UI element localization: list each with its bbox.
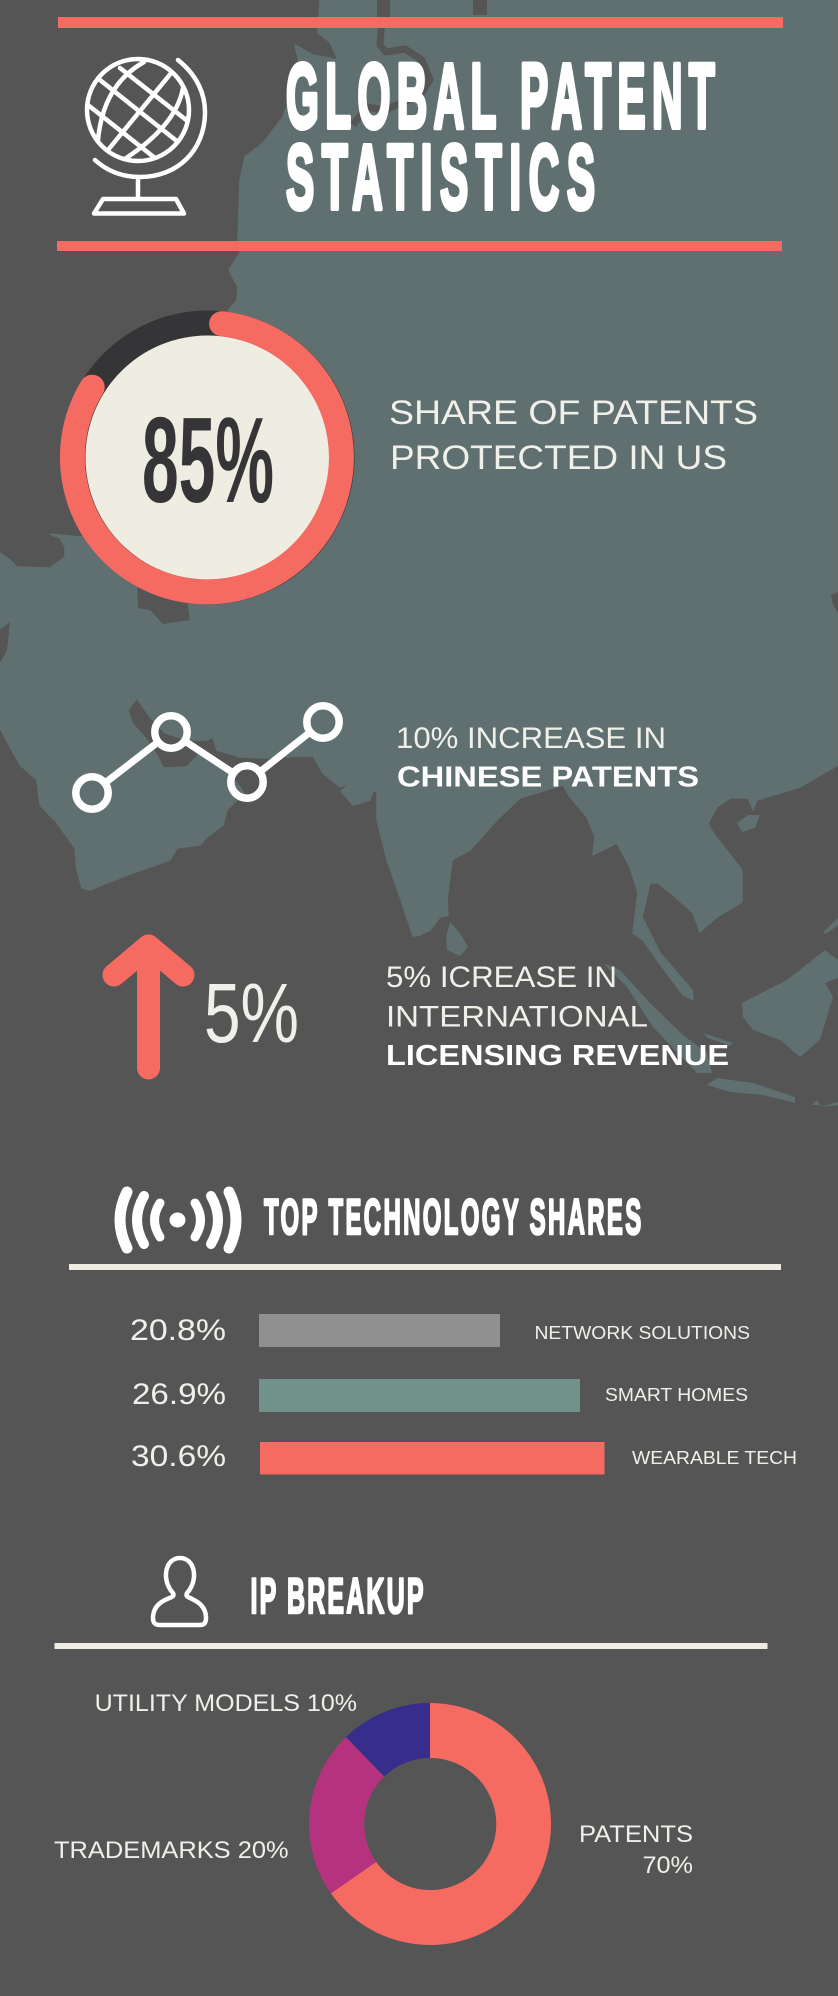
Hainan (737, 815, 760, 832)
icon: line chart (76, 706, 339, 809)
title (286, 45, 715, 229)
bar: wearable tech: 30.6% (131, 1440, 226, 1473)
Caspian Sea (137, 585, 190, 624)
label: utility models: UTILITY MODELS 10% (95, 1690, 357, 1717)
icon: broadcast signal (120, 1192, 236, 1248)
Borneo (742, 950, 838, 1057)
segment: utility models 10% (346, 1703, 430, 1776)
stat text: licensing revenue: INTERNATIONAL (386, 1000, 648, 1034)
Eastern islands (812, 918, 838, 1107)
Java (707, 1078, 795, 1103)
bar: wearable tech: WEARABLE TECH (632, 1447, 797, 1468)
label: patents: 70% (642, 1852, 693, 1879)
title: GLOBAL PATENT (286, 45, 715, 148)
stat: 85% progress ring: 85% (142, 392, 274, 528)
stat text: Chinese patents: CHINESE PATENTS (397, 762, 699, 794)
map of Asia (0, 0, 838, 1107)
Sumatra (603, 963, 712, 1073)
segment: trademarks 20% (309, 1737, 384, 1893)
stat text: licensing revenue: LICENSING REVENUE (386, 1040, 729, 1072)
bar: smart homes: 26.9% (132, 1378, 226, 1411)
stat: 5%: 5% (204, 966, 299, 1060)
heading: IP breakup: IP BREAKUP (250, 1569, 424, 1624)
section rule (54, 1643, 768, 1649)
Sri Lanka (446, 922, 468, 956)
River inlet (353, 17, 430, 125)
top red rule (58, 17, 783, 28)
bar: wearable tech (131, 1440, 797, 1474)
title: STATISTICS (286, 126, 595, 229)
Northern lakes (377, 0, 838, 612)
stat text: share of patents (389, 394, 758, 477)
section rule (69, 1264, 781, 1270)
icon: globe (87, 59, 205, 214)
segment: patents 70% (331, 1703, 551, 1945)
Left sliver (0, 622, 10, 663)
label: trademarks: TRADEMARKS 20% (54, 1837, 289, 1864)
heading: top technology shares: TOP TECHNOLOGY SHARES (264, 1191, 641, 1245)
Bangka (703, 1033, 733, 1046)
stat text: share of patents: SHARE OF PATENTS (389, 394, 758, 432)
stat text: Chinese patents (396, 722, 699, 794)
donut chart: IP breakup (309, 1703, 551, 1945)
bar chart: technology shares (130, 1314, 797, 1474)
bar: network solutions: NETWORK SOLUTIONS (534, 1322, 750, 1343)
bottom red rule (57, 241, 782, 251)
stat text: licensing revenue: 5% ICREASE IN (386, 961, 617, 994)
icon: person (153, 1558, 206, 1625)
bar: smart homes: SMART HOMES (605, 1384, 748, 1405)
icon: up arrow (114, 946, 183, 1068)
bar: network solutions: 20.8% (130, 1314, 226, 1347)
bar: network solutions (130, 1314, 750, 1347)
stat: 85% progress ring (72, 323, 342, 592)
stat text: Chinese patents: 10% INCREASE IN (396, 722, 666, 755)
label: patents: PATENTS (579, 1821, 693, 1848)
stat text: licensing revenue (386, 961, 729, 1072)
bar: smart homes (132, 1378, 748, 1412)
label: patents (579, 1821, 693, 1879)
stat text: share of patents: PROTECTED IN US (390, 439, 727, 477)
